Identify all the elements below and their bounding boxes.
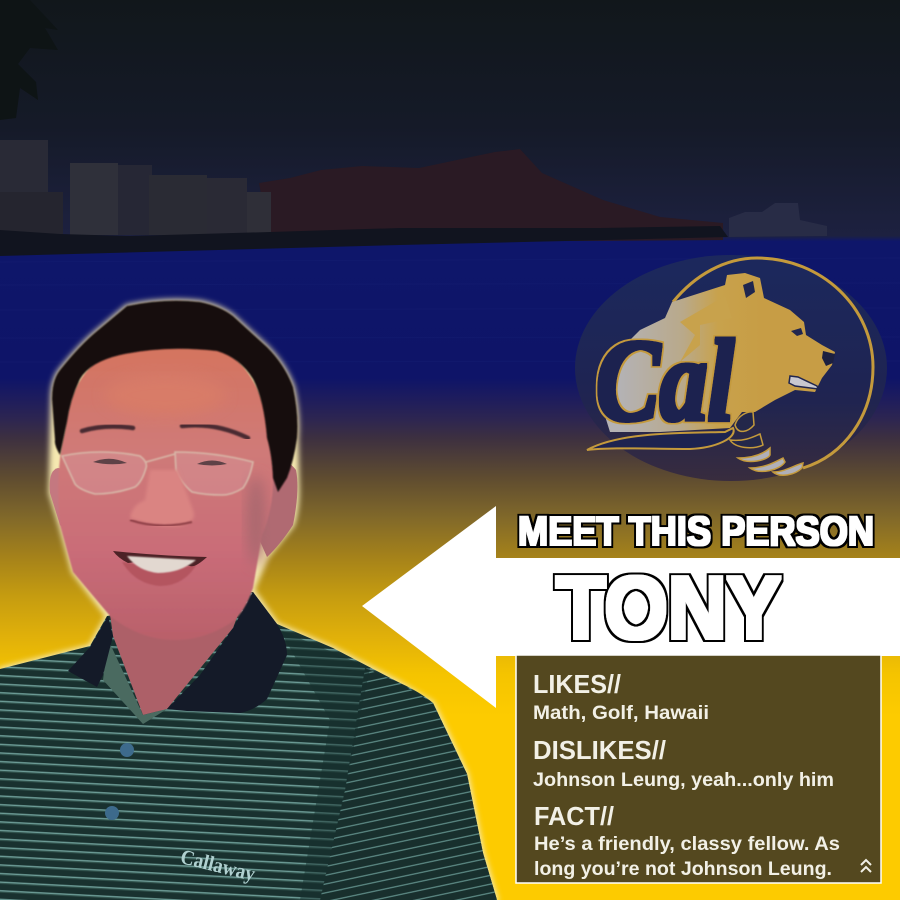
photo: Waikiki skyline and Diamond Head [0,0,827,256]
icon: double chevron up [861,860,871,872]
likes heading: LIKES// [533,669,621,699]
fact text line one: He’s a friendly, classy fellow. As [534,834,840,855]
lower lip [122,562,198,586]
left ear [50,468,72,535]
shirt buttons [105,743,134,820]
cheek shading [247,475,265,565]
shirt logo text: Callaway [178,844,258,886]
neck [108,570,255,715]
right collar [167,592,287,713]
mouth line [113,551,207,566]
water ripples [0,258,900,362]
eyebrows [82,425,248,438]
person portrait [0,301,497,900]
right sleeve [320,668,497,900]
logo oval [575,255,887,481]
bear eye [791,328,803,336]
bear mane highlights [680,296,732,362]
inner collar [103,640,167,724]
tree line and shore [0,226,728,256]
right ear [255,462,297,557]
hotel buildings left [0,140,271,235]
portrait glow outline [0,301,497,900]
Cal script text: Cal [596,315,734,446]
shoulder shadow [280,630,370,900]
palm fronds [0,0,58,120]
gold ring [673,258,873,468]
bear claws [730,412,803,475]
teeth [127,556,196,573]
panel box [516,655,881,883]
mountain: Diamond Head [259,149,723,243]
hair [52,301,298,492]
bear nose [822,351,835,366]
dislikes text: Johnson Leung, yeah...only him [533,770,834,791]
panel: bio [516,655,881,883]
glasses [62,452,253,495]
white arrow callout [362,506,900,708]
nostril shadow [130,520,192,526]
left collar [68,616,113,687]
forehead highlight [105,375,225,415]
Cal bear logo [575,255,887,481]
distant buildings right [729,203,827,237]
nose [130,470,194,526]
Cal swoosh [587,428,734,450]
face [58,345,274,640]
name: Tony: TONY [556,558,781,657]
shirt body [0,592,497,900]
likes text: Math, Golf, Hawaii [533,703,709,724]
fact heading: FACT// [534,801,614,831]
eyes [93,459,227,466]
fact text line two: long you’re not Johnson Leung. [534,859,832,880]
dislikes heading: DISLIKES// [533,735,666,765]
bear ear hollow [743,281,755,298]
bear head [600,273,835,432]
bear teeth [789,376,818,389]
